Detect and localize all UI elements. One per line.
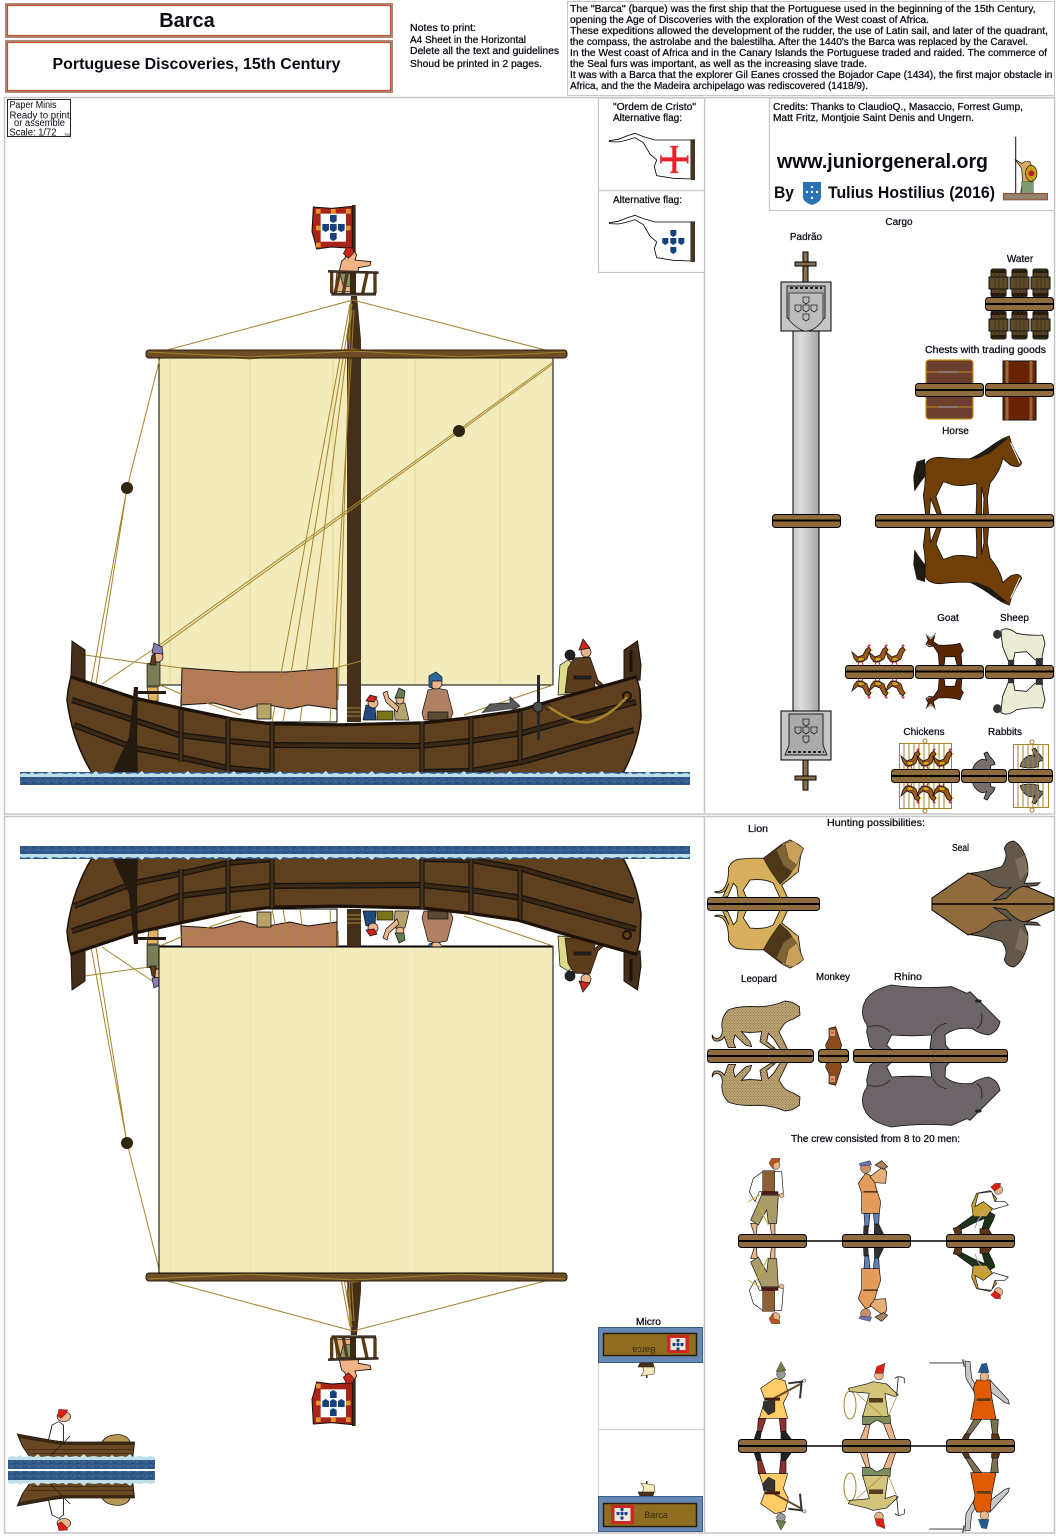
- history description panel: the Seal furs was important, as well as the increasing slave trade.: [570, 59, 867, 70]
- history description panel: It was with a Barca that the explorer Gil Eanes crossed the Bojador Cape (1434), the first major obstacle in: [570, 70, 1052, 81]
- credits panel: www.juniorgeneral.org: [776, 150, 988, 173]
- padrao stone pillar: Padrão: [790, 232, 823, 243]
- cargo: horse: [876, 426, 1054, 605]
- micro ship stand: Micro: [636, 1317, 661, 1328]
- credits panel: Credits: Thanks to ClaudioQ., Masaccio, Forrest Gump,: [773, 102, 1023, 113]
- cargo: water barrels: Water: [1007, 254, 1034, 265]
- cargo: rabbits: [962, 727, 1052, 812]
- animal: monkey: Monkey: [816, 972, 850, 983]
- cargo: goat: Goat: [937, 613, 959, 624]
- crew: bottom row of three men: [738, 1359, 1014, 1533]
- micro base: top (inverted): Barca: [632, 1345, 656, 1355]
- animal: lion: Lion: [748, 824, 768, 835]
- cargo: caged chickens: Chickens: [903, 727, 945, 738]
- animal: leopard: Leopard: [741, 974, 777, 985]
- animal: seal on rock: Seal: [952, 843, 969, 854]
- history description panel: The ''Barca'' (barque) was the first ship that the Portuguese used in the beginning of the 15th Century,: [570, 4, 1036, 15]
- history description panel: In the West coast of Africa and in the Canary Islands the Portuguese traded and raided. The commerce of: [570, 48, 1047, 59]
- paper minis badge: Scale: 1/72: [10, 128, 57, 138]
- cargo: water barrels: [986, 254, 1054, 339]
- history description panel: opening the Age of Discoveries with the exploration of the West coast of Africa.: [570, 15, 929, 26]
- animal: leopard: [708, 974, 814, 1111]
- title box: Barca: [6, 4, 392, 37]
- flag: blue quinas: [609, 215, 695, 262]
- history description panel: the compass, the astrolabe and the balestilha. After the 1440's the Barca was replaced by the Caravel.: [570, 37, 1028, 48]
- animal: lion: [708, 824, 820, 968]
- notes to print: A4 Sheet in the Horizontal: [410, 35, 526, 46]
- hunting heading: Hunting possibilities:: [827, 818, 925, 829]
- subtitle box: Portuguese Discoveries: Portuguese Discoveries, 15th Century: [52, 56, 341, 73]
- flag: Ordem de Cristo cross: [609, 133, 695, 180]
- micro base: top (inverted): [598, 1328, 702, 1362]
- cargo: caged chickens: [892, 727, 960, 813]
- upper panel frame: [4, 98, 1054, 814]
- paper minis badge: [8, 100, 70, 138]
- panel: alternative flags: [598, 98, 704, 272]
- panel: alternative flags: Alternative flag:: [613, 195, 682, 206]
- rowing boat with mirrored half: [8, 1409, 155, 1531]
- cargo: chests with trading goods: Chests with trading goods: [925, 345, 1046, 356]
- history description panel: These expeditions allowed the development of the rudder, the use of Latin sail, and later of the quadrant,: [570, 26, 1048, 37]
- cargo: horse: Horse: [942, 426, 969, 437]
- cargo heading: Cargo: [885, 217, 913, 228]
- notes to print: Shoud be printed in 2 pages.: [410, 59, 542, 70]
- cargo: rabbits: Rabbits: [988, 727, 1022, 738]
- animal: rhino: Rhino: [894, 972, 922, 983]
- subtitle box: Portuguese Discoveries: [6, 41, 392, 92]
- paper minis badge: or assemble: [14, 118, 65, 129]
- animal: monkey: [816, 972, 850, 1085]
- credits panel: By: [774, 183, 794, 202]
- padrao stone pillar: [772, 232, 840, 790]
- crew heading: The crew consisted from 8 to 20 men:: [791, 1134, 960, 1145]
- crew: top row of three men: [738, 1158, 1014, 1324]
- notes to print: Delete all the text and guidelines: [410, 46, 559, 57]
- micro base: bottom: Barca: [644, 1510, 668, 1520]
- credits panel: Matt Fritz, Montjoie Saint Denis and Ungern.: [773, 113, 974, 124]
- micro base: bottom: [598, 1496, 702, 1532]
- paper minis badge: TM: [64, 132, 70, 137]
- icon: Tulius Hostilius soldier: [1003, 137, 1048, 200]
- paper minis badge: Ready to print: [10, 110, 70, 122]
- cargo: chests with trading goods: [916, 345, 1054, 420]
- animal: seal on rock: [932, 841, 1054, 967]
- micro ship stand: [598, 1317, 704, 1532]
- cargo: sheep: [986, 613, 1054, 714]
- title box: Barca: Barca: [159, 10, 216, 32]
- icon: blue shield: [803, 182, 821, 205]
- cargo: loose chickens: [846, 644, 914, 699]
- animal: rhino: [854, 972, 1008, 1127]
- panel: alternative flags: "Ordem de Cristo": [613, 102, 696, 113]
- ship: upright half: [20, 205, 690, 785]
- panel: alternative flags: Alternative flag:: [613, 113, 682, 124]
- cargo: sheep: Sheep: [1000, 613, 1029, 624]
- paper minis badge: Paper Minis: [10, 100, 56, 111]
- notes to print: Notes to print:: [410, 23, 476, 34]
- credits panel: Tulius Hostilius (2016): [828, 183, 995, 202]
- history description panel: Africa, and the the Madeira archipelago was rediscovered (1418/9).: [570, 81, 868, 92]
- history description panel: [568, 2, 1054, 96]
- notes to print: [410, 23, 559, 70]
- ship: mirrored half with plain sail: [20, 846, 690, 1426]
- cargo: goat: [916, 613, 984, 709]
- credits panel: [770, 98, 1054, 210]
- lower panel frame: [4, 816, 1054, 1533]
